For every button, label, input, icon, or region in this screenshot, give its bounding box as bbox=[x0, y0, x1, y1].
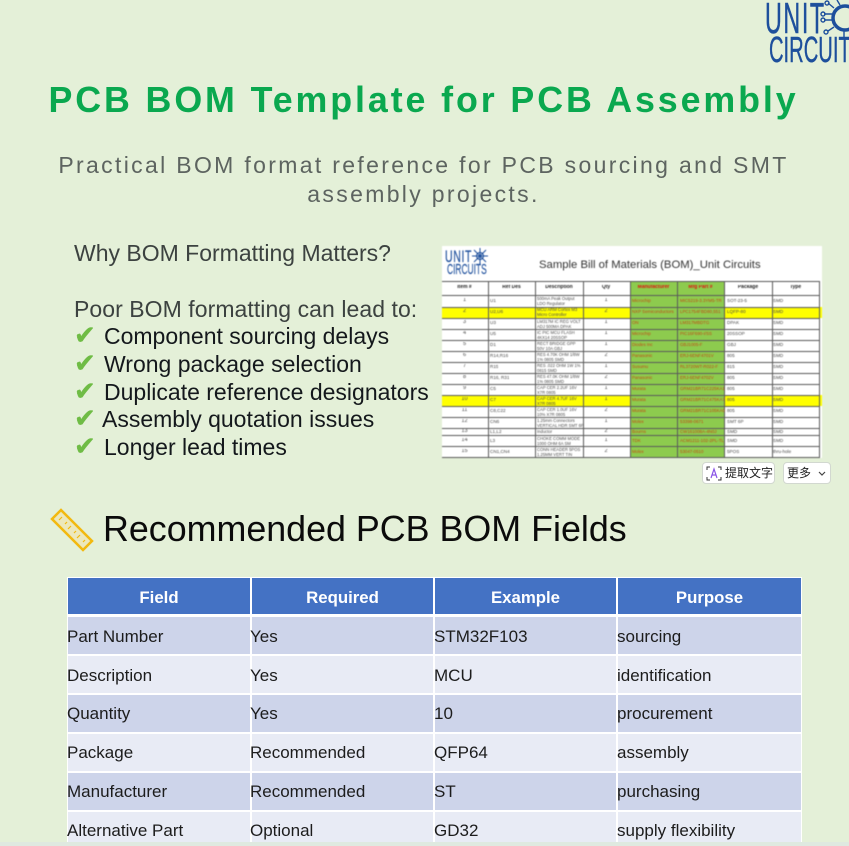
table text: Optional bbox=[250, 821, 313, 840]
table text: LPC1754FBD80,551 bbox=[680, 309, 721, 314]
table text: QFP64 bbox=[434, 743, 488, 762]
table text: GBJ bbox=[727, 342, 736, 347]
table text: NXP Semiconductors bbox=[632, 309, 674, 314]
table text: SMD bbox=[773, 364, 783, 369]
table text: Microchip bbox=[632, 331, 651, 336]
table text: sourcing bbox=[617, 627, 681, 646]
button: more bbox=[783, 462, 831, 484]
table text: 815 bbox=[727, 364, 735, 369]
table text: Part Number bbox=[67, 627, 163, 646]
table text: Murata bbox=[632, 408, 646, 413]
table text: CAP CER 1.0UF 16V 10% X7R 0805 bbox=[537, 407, 577, 417]
bottom edge strip bbox=[0, 842, 849, 846]
table text: Package bbox=[67, 743, 133, 762]
table text: SMD bbox=[773, 408, 783, 413]
table text: ACM1211-102-2PL-TL bbox=[680, 438, 724, 443]
table text: Panasonic bbox=[632, 353, 653, 358]
table text: CN6 bbox=[490, 419, 499, 424]
table text: RES 47.0K OHM 1/8W 1% 0805 SMD bbox=[537, 374, 580, 384]
table text: SMD bbox=[773, 397, 783, 402]
table text: purchasing bbox=[617, 782, 700, 801]
table header bbox=[68, 578, 250, 614]
table contents: Purpose bbox=[676, 588, 743, 607]
table text: Molex bbox=[632, 449, 644, 454]
table text: 53047-0510 bbox=[680, 449, 703, 454]
image logo: CIRCUITS bbox=[447, 261, 487, 278]
table text: SMT 6P bbox=[727, 419, 744, 424]
table text: Recommended bbox=[250, 743, 365, 762]
table text: GD32 bbox=[434, 821, 478, 840]
table text: U2,U6 bbox=[490, 309, 503, 314]
table text: 805 bbox=[727, 408, 735, 413]
subtitle bbox=[58, 152, 789, 207]
table text bbox=[456, 284, 802, 457]
table text: U3 bbox=[490, 320, 496, 325]
lead-in text: Poor BOM formatting can lead to: bbox=[74, 296, 417, 322]
table text: Susumu bbox=[632, 364, 648, 369]
table text: Murata bbox=[632, 386, 646, 391]
table text: TDK bbox=[632, 438, 641, 443]
table text: SMD bbox=[773, 429, 783, 434]
table text: CAP CER 2.2UF 16V X7R 0805 bbox=[537, 385, 577, 395]
green columns bbox=[630, 281, 724, 457]
table text: CW161008A-4N0J bbox=[680, 429, 717, 434]
text block: why BOM formatting matters bbox=[74, 240, 417, 322]
table text: SMD bbox=[773, 438, 783, 443]
row: alternative part bbox=[68, 812, 801, 842]
table text: CN1,CN4 bbox=[490, 449, 510, 454]
table text: Diodes Inc bbox=[632, 342, 653, 347]
title: PCB BOM Template for PCB Assembly bbox=[48, 80, 799, 120]
table text: 500mA Peak Output LDO Regulator bbox=[537, 296, 574, 306]
table text: ST bbox=[434, 782, 456, 801]
table text: 805 bbox=[727, 397, 735, 402]
table text: SMD bbox=[773, 320, 783, 325]
panel: sample BOM image bbox=[442, 246, 822, 458]
grid bbox=[442, 281, 820, 282]
table text: SMD bbox=[773, 353, 783, 358]
table text: R14,R16 bbox=[490, 353, 508, 358]
table text: LQFP-80 bbox=[727, 309, 746, 314]
table text: thru-hole bbox=[773, 449, 791, 454]
table text: 805 bbox=[727, 386, 735, 391]
table text: SMD bbox=[773, 331, 783, 336]
table text: LM317MBDTG bbox=[680, 320, 709, 325]
table text: SMD bbox=[773, 375, 783, 380]
row: part number bbox=[68, 617, 801, 654]
table text: R15 bbox=[490, 364, 498, 369]
table text: STM32F103 bbox=[434, 627, 528, 646]
table text: MCU ARM Cortex M3 Micro Controller bbox=[537, 307, 577, 317]
table text: SMD bbox=[773, 298, 783, 303]
table text: 5POS bbox=[727, 449, 739, 454]
table text: IC PIC MCU FLASH 4KX14 20SSOP bbox=[537, 330, 575, 340]
table text: R16, R31 bbox=[490, 375, 509, 380]
list item: Component sourcing delays bbox=[104, 323, 389, 349]
table text: Description bbox=[67, 666, 152, 685]
table text: Quantity bbox=[67, 704, 130, 723]
table text: Manufacturer bbox=[67, 782, 167, 801]
BOM table bbox=[441, 280, 823, 459]
list item: ✔ bbox=[74, 377, 96, 407]
table header: Field bbox=[139, 588, 179, 607]
table contents: Example bbox=[491, 588, 560, 607]
table text: SMD bbox=[727, 438, 737, 443]
table text: CONN HEADER 5POS 1.25MM VERT TIN bbox=[537, 447, 580, 457]
table text: U1 bbox=[490, 298, 496, 303]
table text: MIC5219-3.3YM5-TR bbox=[680, 298, 722, 303]
table text: SMD bbox=[773, 342, 783, 347]
table text: SOT-23-5 bbox=[727, 298, 747, 303]
button: extract text: 提取文字 bbox=[725, 466, 773, 480]
table text: ERJ-6ENF4702V bbox=[680, 375, 714, 380]
image logo bbox=[444, 247, 489, 278]
table text: C5 bbox=[490, 386, 496, 391]
table text: D1 bbox=[490, 342, 496, 347]
table text: Bourns bbox=[632, 429, 646, 434]
table text: 10 bbox=[434, 704, 453, 723]
table text: SMD bbox=[727, 429, 737, 434]
table text: 805 bbox=[727, 375, 735, 380]
table text: GBJ1005-F bbox=[680, 342, 702, 347]
table text: Molex bbox=[632, 419, 644, 424]
table text: RL3720WT-R022-F bbox=[680, 364, 718, 369]
table text: Microchip bbox=[632, 298, 651, 303]
table text: supply flexibility bbox=[617, 821, 735, 840]
list item: Longer lead times bbox=[104, 434, 287, 460]
table text: 1.25mm Connectors VERTICAL HDR SMT 6P bbox=[537, 418, 584, 428]
logo: Unit Circuits bbox=[765, 0, 849, 66]
table text: Yes bbox=[250, 666, 278, 685]
list item: ✔ bbox=[74, 432, 96, 462]
table text: CAP CER 4.7UF 16V X7R 0805 bbox=[537, 396, 577, 406]
table text: L3 bbox=[490, 438, 495, 443]
table text: RECT BRIDGE GPP 50V 10A GBJ bbox=[537, 341, 575, 351]
table text: SMD bbox=[773, 309, 783, 314]
section heading: recommended fields: Recommended PCB BOM Fields bbox=[103, 509, 627, 549]
table text: 53398-0671 bbox=[680, 419, 703, 424]
list item: ✔ bbox=[74, 349, 96, 379]
heading: why BOM formatting matters: Why BOM Formatting Matters? bbox=[74, 240, 391, 266]
table text: Alternative Part bbox=[67, 821, 183, 840]
yellow rows bbox=[442, 307, 630, 318]
table text: Panasonic bbox=[632, 375, 653, 380]
table text: Yes bbox=[250, 704, 278, 723]
table text: CHOKE COMM MODE 1000 OHM 6A SM bbox=[537, 436, 580, 446]
row: package bbox=[68, 734, 801, 771]
list item: ✔ bbox=[74, 404, 96, 434]
checklist: formatting issues bbox=[74, 321, 429, 462]
list item: ✔ bbox=[74, 321, 96, 351]
table text: procurement bbox=[617, 704, 712, 723]
table text: Murata bbox=[632, 397, 646, 402]
list item: Assembly quotation issues bbox=[102, 406, 374, 432]
image title: Sample Bill of Materials (BOM)_Unit Circuits bbox=[539, 259, 761, 271]
table text: C8,C22 bbox=[490, 408, 506, 413]
icon: chevron bbox=[818, 472, 826, 476]
table contents: Required bbox=[306, 588, 379, 607]
table text: Yes bbox=[250, 627, 278, 646]
row: quantity bbox=[68, 695, 801, 732]
button: extract text bbox=[702, 462, 775, 484]
table text: ON bbox=[632, 320, 639, 325]
table text: RES .022 OHM 1W 1% 0815 SMD bbox=[537, 363, 581, 373]
list item: Wrong package selection bbox=[104, 351, 362, 377]
table text: Inductor bbox=[537, 429, 552, 434]
table text: assembly bbox=[617, 743, 689, 762]
table text: SMD bbox=[773, 386, 783, 391]
table text: MCU bbox=[434, 666, 473, 685]
table text: DPAK bbox=[727, 320, 739, 325]
table text: identification bbox=[617, 666, 712, 685]
icon: text scan bbox=[706, 466, 722, 480]
icon: ruler bbox=[50, 508, 94, 552]
table text: C7 bbox=[490, 397, 496, 402]
table text: U5 bbox=[490, 331, 496, 336]
table: recommended PCB BOM fields bbox=[67, 577, 802, 842]
table text: PIC16F690-I/SS bbox=[680, 331, 712, 336]
row: manufacturer bbox=[68, 773, 801, 810]
table text: 805 bbox=[727, 353, 735, 358]
table text: RES 4.70K OHM 1/8W 1% 0805 SMD bbox=[537, 352, 580, 362]
list item: Duplicate reference designators bbox=[104, 379, 429, 405]
subtitle: assembly projects. bbox=[307, 181, 540, 207]
table text: LM317M IC REG VOLT ADJ 500MA DPAK bbox=[537, 319, 581, 329]
table text: 20SSOP bbox=[727, 331, 745, 336]
row: description bbox=[68, 656, 801, 693]
image logo: UNIT bbox=[445, 247, 472, 266]
table text: ERJ-6ENF4701V bbox=[680, 353, 714, 358]
table text: SMD bbox=[773, 419, 783, 424]
button: more: 更多 bbox=[787, 466, 811, 480]
table text: L1,L2 bbox=[490, 429, 502, 434]
table text: Recommended bbox=[250, 782, 365, 801]
subtitle: Practical BOM format reference for PCB sourcing and SMT bbox=[58, 152, 789, 178]
